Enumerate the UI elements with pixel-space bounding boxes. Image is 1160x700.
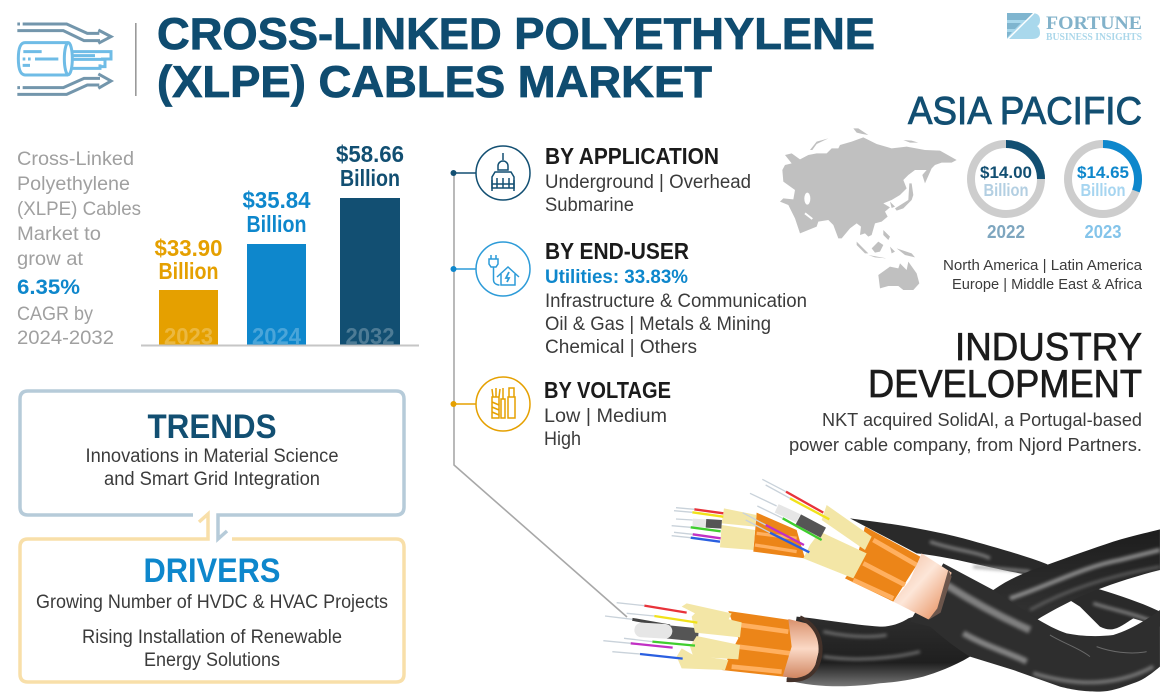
segment: by voltage: BY VOLTAGE: [544, 377, 671, 403]
illustration: cables: [603, 479, 1160, 692]
text block: industry development: power cable company, from Njord Partners.: [789, 434, 1142, 455]
panel: drivers: Rising Installation of Renewable: [82, 627, 342, 648]
text block: CAGR summary: (XLPE) Cables: [17, 198, 141, 220]
bar 2023: 2023: [164, 323, 213, 349]
bar 2024: Billion: [246, 211, 306, 237]
panel: trends: TRENDS: [148, 408, 276, 446]
segment: by end-user: Utilities: 33.83%: [545, 267, 688, 288]
segment: by end-user: Infrastructure & Communication: [545, 291, 807, 312]
bar 2023: Billion: [158, 258, 218, 284]
text block: CAGR summary: grow at: [17, 248, 84, 270]
panel: trends: and Smart Grid Integration: [104, 469, 320, 490]
segment: by voltage: Low | Medium: [544, 406, 667, 427]
donut: 2023: 2023: [1084, 222, 1122, 242]
panel: trends: Innovations in Material Science: [86, 446, 338, 467]
header divider: [135, 23, 137, 96]
map: Asia Pacific: [780, 128, 957, 290]
white gap in twist: [1050, 619, 1118, 636]
donut: 2022: 2022: [987, 222, 1025, 242]
segment: by voltage: High: [544, 429, 581, 450]
text block: other regions: [943, 257, 1143, 293]
bar 2024: [242, 187, 311, 349]
panel: drivers: Energy Solutions: [144, 650, 280, 671]
donut: 2022: [971, 144, 1041, 242]
text block: CAGR summary: Cross-Linked: [17, 148, 134, 170]
text block: CAGR summary: [17, 148, 141, 349]
text block: industry development: [789, 409, 1142, 455]
front black cable: [910, 563, 1160, 692]
text block: industry development: NKT acquired SolidAl, a Portugal-based: [822, 409, 1142, 430]
icon: cable cross-section: [492, 153, 514, 191]
upper wires: [691, 492, 829, 552]
heading: industry development: DEVELOPMENT: [868, 363, 1142, 406]
panel: drivers: Growing Number of HVDC & HVAC Projects: [36, 592, 388, 613]
bar 2024: $35.84: [242, 187, 311, 213]
segment: by end-user: BY END-USER: [545, 238, 689, 264]
heading: Asia Pacific: ASIA PACIFIC: [908, 90, 1142, 133]
bar 2032: [336, 141, 404, 349]
bar 2023: $33.90: [154, 235, 222, 261]
connector line: [454, 173, 627, 617]
bar 2032: $58.66: [336, 141, 404, 167]
logo: Fortune Business Insights: FORTUNE: [1046, 13, 1142, 34]
lower copper band: [783, 619, 820, 678]
text block: CAGR summary: Market to: [17, 223, 101, 245]
text block: other regions: Europe | Middle East & Africa: [952, 276, 1143, 293]
text block: CAGR summary: Polyethylene: [17, 173, 130, 195]
title: (XLPE) CABLES MARKET: [157, 58, 712, 107]
segment: by application: Submarine: [545, 195, 634, 216]
segment: by application: [450, 143, 751, 216]
heading: industry development: [868, 326, 1142, 406]
logo: Fortune Business Insights: BUSINESS INSIGHTS: [1046, 32, 1142, 43]
panel: trends: [20, 391, 404, 539]
upper orange bundle: [845, 527, 922, 602]
text block: other regions: North America | Latin America: [943, 257, 1143, 274]
upper yellow strands: [822, 505, 872, 550]
lower yellow strands: [682, 603, 732, 620]
text block: CAGR summary: 6.35%: [17, 276, 80, 299]
segment: by end-user: [450, 238, 807, 358]
segment: by end-user: Chemical | Others: [545, 337, 697, 358]
logo: Fortune Business Insights: [1007, 13, 1142, 43]
icon: three cables: [492, 388, 515, 418]
icon: cable header: [17, 24, 111, 94]
back black strand: [850, 518, 1160, 629]
title: CROSS-LINKED POLYETHYLENE: [157, 10, 875, 59]
bar 2032: Billion: [340, 165, 400, 191]
segment: by application: BY APPLICATION: [545, 143, 719, 169]
segment: by application: Underground | Overhead: [545, 172, 751, 193]
segment: by end-user: Oil & Gas | Metals & Mining: [545, 314, 771, 335]
icon: plug and house: [489, 255, 519, 285]
text block: CAGR summary: CAGR by: [17, 303, 93, 325]
donut: 2022: Billion: [984, 180, 1028, 200]
panel: drivers: [20, 514, 404, 682]
lower black cable: [787, 529, 1160, 686]
bar 2024: 2024: [252, 323, 301, 349]
text block: CAGR summary: 2024-2032: [17, 327, 114, 349]
bar 2023: [154, 235, 222, 349]
donut: 2022: $14.00: [980, 163, 1032, 182]
donut: 2023: [1068, 144, 1138, 242]
lower wires and core: [632, 619, 698, 635]
bar chart: [141, 141, 419, 349]
lower orange bundle: [722, 611, 793, 677]
donut: 2023: $14.65: [1077, 163, 1129, 182]
upper copper band: [893, 553, 952, 619]
title: [157, 10, 875, 107]
segment: by voltage: [450, 377, 671, 450]
heading: industry development: INDUSTRY: [955, 326, 1142, 369]
panel: drivers: DRIVERS: [144, 552, 280, 590]
bar 2032: 2032: [346, 323, 394, 349]
donut: 2023: Billion: [1080, 180, 1126, 200]
